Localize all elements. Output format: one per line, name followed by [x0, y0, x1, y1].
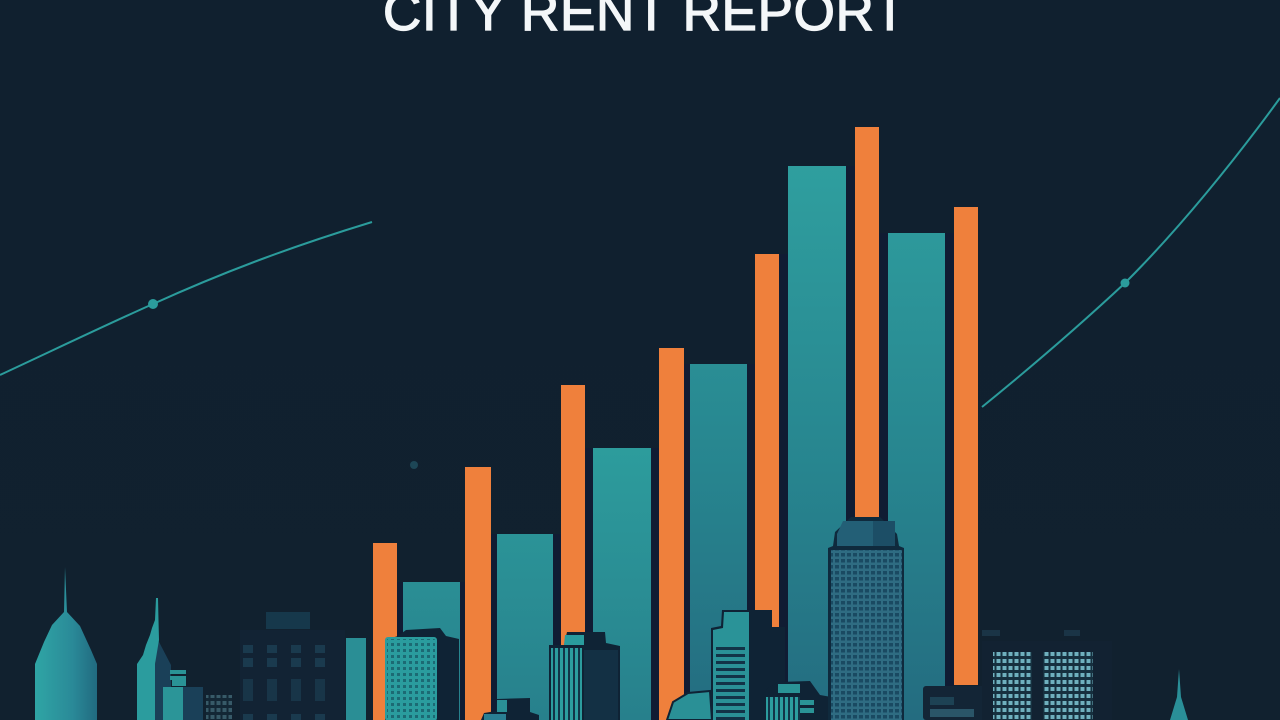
stepped tower: [137, 598, 171, 720]
rounded low building: [667, 691, 712, 720]
dark office block: [240, 612, 345, 720]
small striped block: [765, 681, 837, 720]
orange bar shadows: [397, 166, 954, 720]
small low building: [481, 698, 539, 720]
grid building: [385, 628, 459, 720]
right trend line: [982, 98, 1280, 407]
skyline left: [35, 567, 366, 720]
small dot: [410, 461, 418, 469]
horizontal-striped tower: [711, 610, 785, 720]
teal slab: [346, 638, 366, 720]
skyline centre: [385, 517, 904, 720]
left trend line: [0, 222, 372, 375]
main skyscraper: [828, 517, 904, 720]
tower with spire: [35, 567, 97, 720]
teal bars: [403, 166, 945, 720]
bar chart: [373, 127, 978, 720]
dark low block: [923, 686, 985, 720]
small window block: [206, 695, 232, 720]
distant spire: [1170, 669, 1188, 720]
small annex building: [163, 670, 203, 720]
twin window towers: [982, 630, 1112, 720]
skyline right: [923, 630, 1188, 720]
orange bars: [373, 127, 978, 720]
striped building: [549, 632, 620, 720]
